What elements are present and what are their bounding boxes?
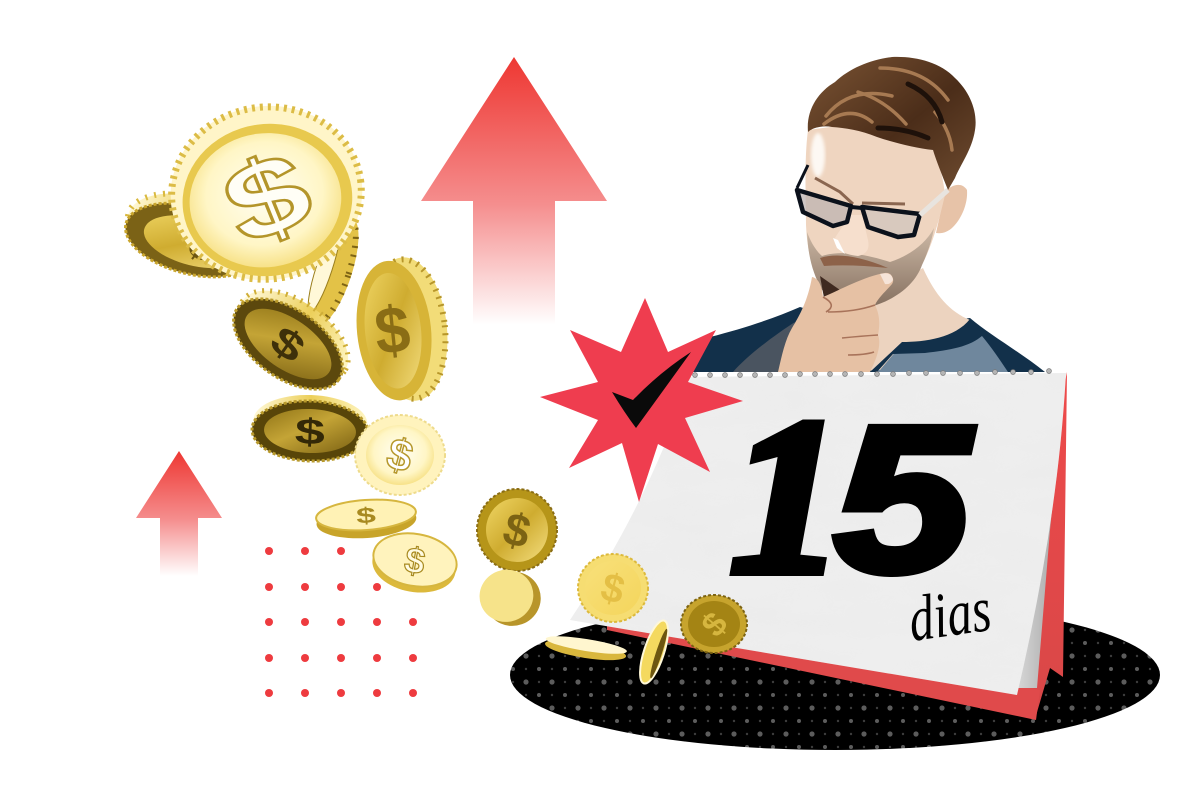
collar xyxy=(870,319,983,372)
hair dark strands xyxy=(878,84,942,138)
black dotted ellipse xyxy=(510,600,1160,750)
beard xyxy=(807,228,934,307)
red back and base xyxy=(607,372,1067,719)
coin: edge-on behind xyxy=(299,212,368,330)
coin: flat dark: $ xyxy=(294,411,326,452)
coin: flat pale: $ xyxy=(355,503,377,529)
coin: behind big coin xyxy=(118,181,269,289)
coin: dark gold round xyxy=(477,489,557,571)
dot grid xyxy=(265,547,417,697)
coin: flat pale xyxy=(315,497,417,541)
coin: pale round: $ xyxy=(382,429,418,482)
fingernail xyxy=(880,273,893,284)
number 15: 1 xyxy=(730,374,844,620)
spiral rings xyxy=(693,369,1051,377)
big up arrow xyxy=(421,57,607,326)
coin: big pale xyxy=(159,94,374,293)
coin: big pale: $ xyxy=(207,127,328,269)
calendar xyxy=(570,369,1067,720)
man thinking xyxy=(693,57,1045,372)
coin: behind big coin: $ xyxy=(180,225,223,271)
handwritten dias: dias xyxy=(904,574,995,656)
small up arrow xyxy=(136,451,222,576)
number 15: 5 xyxy=(834,384,974,616)
finger lines xyxy=(823,297,878,355)
rear sheet xyxy=(1018,430,1060,688)
hair highlights xyxy=(824,68,952,150)
coin: flat dark xyxy=(251,393,369,463)
nose xyxy=(834,215,869,256)
coin: dark page: $ xyxy=(694,605,735,644)
ear xyxy=(936,185,967,233)
coin: flat on ellipse xyxy=(544,633,628,664)
brows xyxy=(815,178,905,204)
red starburst xyxy=(540,298,743,502)
coin: on page yellow xyxy=(578,554,648,622)
moustache xyxy=(820,256,888,268)
coin: on page yellow: $ xyxy=(596,565,629,613)
coin: lower pale: $ xyxy=(401,539,428,582)
coin: tilted dark xyxy=(218,272,364,407)
nose highlight xyxy=(833,238,845,254)
coin: vertical sliver xyxy=(634,618,674,686)
hand xyxy=(778,273,893,372)
coin: tilted dark: $ xyxy=(262,318,313,372)
paper page xyxy=(570,373,1066,695)
neck xyxy=(850,268,970,372)
face xyxy=(806,127,945,307)
shadow between thumb and finger xyxy=(820,276,840,298)
left sleeve grey panel xyxy=(733,322,795,372)
glasses xyxy=(797,165,948,237)
number 15 xyxy=(730,374,974,620)
coin: right tall: $ xyxy=(371,292,414,369)
coin: lower pale xyxy=(368,527,461,599)
coin: dark page xyxy=(681,595,747,653)
coin: dark gold round: $ xyxy=(498,502,536,558)
coin: right tall xyxy=(350,253,454,406)
check mark xyxy=(612,352,691,428)
base front strip xyxy=(607,612,1040,720)
coin: tilted under xyxy=(472,560,548,635)
chest grey panel xyxy=(872,336,1008,372)
temple highlight xyxy=(811,133,825,177)
shirt xyxy=(693,307,1045,372)
hair xyxy=(808,57,976,190)
coin: pale round xyxy=(355,415,445,495)
